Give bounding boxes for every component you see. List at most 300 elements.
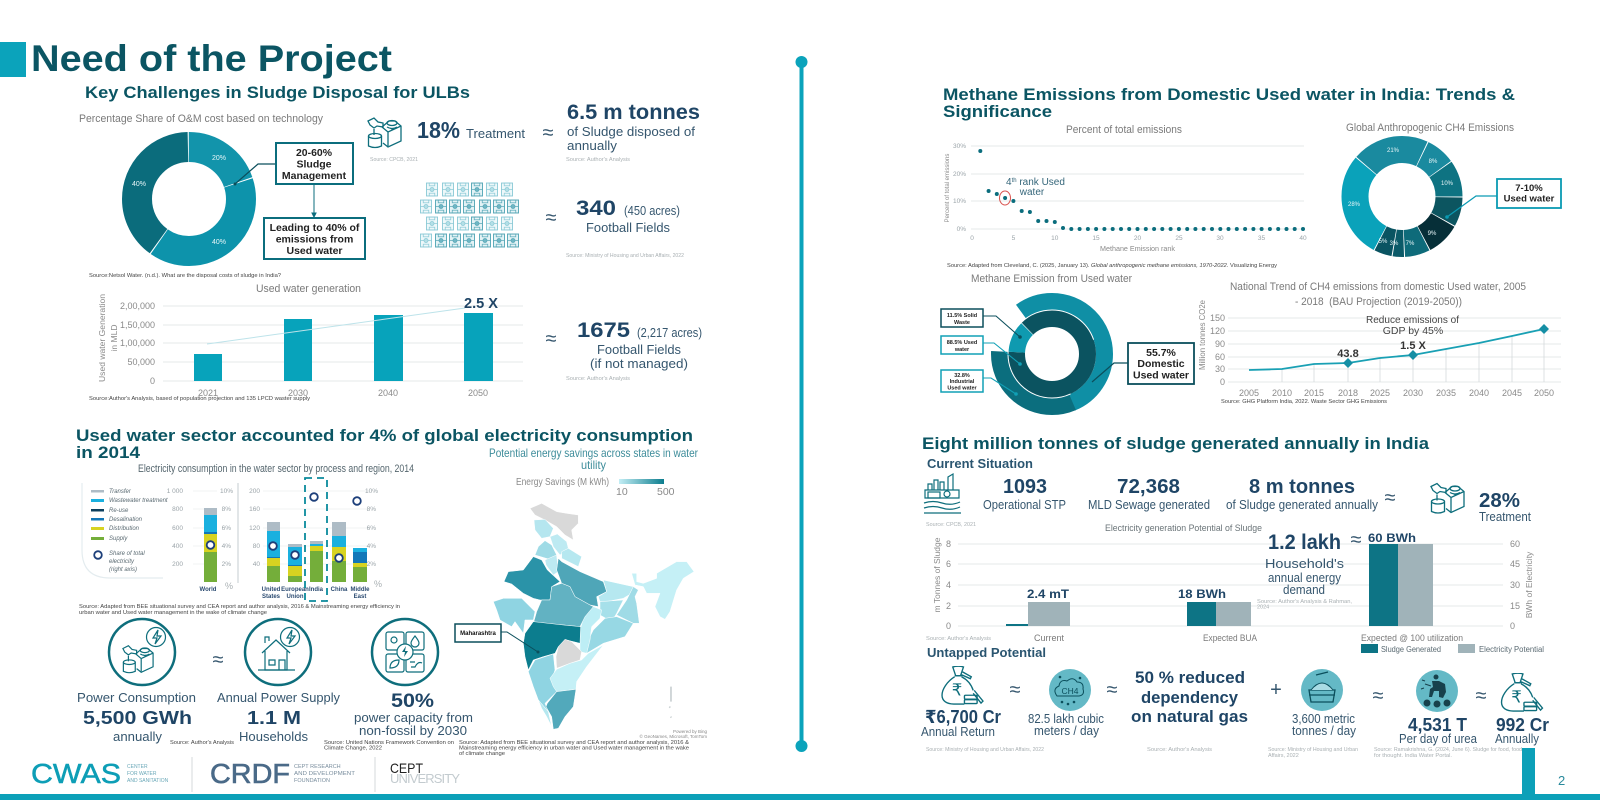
title accent square bbox=[0, 42, 26, 77]
scatter chart title: Percent of total emissions bbox=[1066, 124, 1182, 136]
stat: annual power supply: Households bbox=[239, 729, 309, 744]
page number: 2 bbox=[1558, 773, 1565, 788]
logo: CWAS: CENTER bbox=[127, 764, 148, 770]
source: UNFCCC: Climate Change, 2022 bbox=[324, 746, 382, 752]
source: author analysis: Source: Author's Analysis bbox=[926, 636, 991, 642]
line chart: national CH4 trend: Reduce emissions of bbox=[1366, 314, 1459, 326]
line chart: national CH4 trend: 60 bbox=[1215, 352, 1225, 362]
stacked bar chart: world: 400 bbox=[172, 543, 183, 550]
logo: CRDF: AND DEVELOPMENT bbox=[294, 771, 356, 777]
map attribution: © GeoNames, Microsoft, TomTom bbox=[640, 733, 707, 739]
donut chart: O&M cost share: 20% bbox=[212, 155, 226, 162]
logo: CWAS bbox=[31, 758, 169, 789]
bar chart: used water generation bbox=[97, 294, 523, 398]
donut labels: 9% bbox=[1428, 231, 1437, 237]
stacked bar chart: world: 1 000 bbox=[167, 488, 183, 495]
stat: reduced gas dependency bbox=[1131, 668, 1248, 726]
callout: 1.2 lakh households: 1.2 lakh bbox=[1268, 531, 1341, 554]
icon: household power circle bbox=[245, 619, 311, 685]
stat: reduced gas dependency: 50 % reduced bbox=[1135, 668, 1245, 687]
stacked bar chart: regions: Middle bbox=[350, 587, 370, 593]
bar chart: electricity potential of sludge: Expected @ 100 utilization bbox=[1361, 633, 1463, 643]
stacked bar chart: world: 2% bbox=[222, 561, 231, 568]
bar chart: used water generation: 2,00,000 bbox=[120, 301, 155, 311]
stat: sludge generated: 8 m tonnes bbox=[1249, 476, 1355, 498]
scatter chart: methane emission rank: 0% bbox=[957, 226, 966, 233]
legend: stacked chart: Transfer bbox=[109, 489, 132, 495]
stat: annual return bbox=[921, 707, 1001, 739]
donut labels: 5% bbox=[1379, 239, 1388, 245]
sources: untapped potential: Affairs, 2022 bbox=[1268, 753, 1299, 759]
bar chart: electricity potential of sludge: 4 bbox=[946, 580, 951, 590]
stacked bar chart: world: 6% bbox=[222, 525, 231, 532]
callout: sludge management: Sludge bbox=[296, 158, 332, 170]
stat: metric tonnes: 3,600 metric bbox=[1292, 711, 1355, 726]
approx sign: ≈ bbox=[1373, 685, 1384, 707]
line chart: national CH4 trend bbox=[1198, 299, 1561, 398]
stacked bar chart: regions: European bbox=[281, 587, 309, 593]
source: author analysis: Source: Author's Analysis bbox=[566, 376, 630, 382]
callout: 1.2 lakh households bbox=[1257, 529, 1362, 610]
legend: stacked chart: Distribution bbox=[109, 526, 140, 532]
bar chart: used water generation: 2030 bbox=[288, 388, 308, 398]
callout: 1.2 lakh households: Source: Author's Analysis & Rahman, bbox=[1257, 599, 1352, 605]
logo: CEPT University: UNIVERSITY bbox=[390, 771, 460, 786]
scatter chart: methane emission rank: 25 bbox=[1175, 235, 1183, 242]
bar chart: electricity potential of sludge: 8 bbox=[946, 539, 951, 549]
logo: CRDF bbox=[210, 758, 356, 789]
stacked bar chart: regions: East bbox=[354, 594, 366, 600]
scatter chart: methane emission rank: 10% bbox=[953, 198, 966, 205]
bar chart: used water generation: 2050 bbox=[468, 388, 488, 398]
bar chart: electricity potential of sludge: 45 bbox=[1510, 559, 1520, 569]
logo: CWAS: CWAS bbox=[31, 758, 121, 789]
bar chart: electricity potential of sludge: Current bbox=[1034, 633, 1065, 643]
nested donut chart: methane from used water bbox=[1000, 302, 1104, 406]
stat: annual value: 992 Cr bbox=[1496, 715, 1549, 735]
panel: eight million tonnes of sludge bbox=[921, 434, 1549, 759]
callout: domestic used water: 55.7% bbox=[1146, 347, 1177, 359]
stacked bar chart: world: World bbox=[200, 587, 217, 593]
callout: industrial used water bbox=[941, 370, 1018, 396]
stacked bar chart: regions: % bbox=[374, 579, 382, 589]
stat: 1675 football fields: (2,217 acres) bbox=[637, 325, 702, 340]
bar chart: electricity potential of sludge: BWh of Electricity bbox=[1524, 551, 1534, 618]
bar chart title: Electricity generation Potential of Sludge bbox=[1105, 523, 1262, 534]
scatter chart: methane emission rank: Percent of total emissions bbox=[945, 154, 951, 222]
callout: sludge management bbox=[234, 143, 353, 186]
callout: 1.2 lakh households: 2024 bbox=[1257, 604, 1269, 610]
callout: domestic used water: Used water bbox=[1133, 370, 1189, 382]
line chart: national CH4 trend: 2018 bbox=[1338, 388, 1358, 398]
stacked bar chart: regions: United bbox=[262, 587, 281, 593]
stat: reduced gas dependency: dependency bbox=[1141, 688, 1239, 707]
callout: domestic used water bbox=[1092, 343, 1194, 384]
legend: stacked chart: Desalination bbox=[109, 517, 143, 523]
stat: 1675 football fields: 1675 bbox=[577, 319, 630, 342]
line chart: national CH4 trend: 2040 bbox=[1469, 388, 1489, 398]
map title: Potential energy savings across states in water bbox=[489, 446, 698, 460]
bar chart: electricity potential of sludge: 6 bbox=[946, 559, 951, 569]
stacked chart title: Electricity consumption in the water sector by process and region, 2014 bbox=[138, 463, 414, 475]
stacked bar chart: world: 800 bbox=[172, 506, 183, 513]
callout: industrial used water: Used water bbox=[947, 386, 978, 392]
approx sign: ≈ bbox=[546, 207, 557, 229]
stacked bar chart: world: 4% bbox=[222, 543, 231, 550]
line chart: national CH4 trend: 43.8 bbox=[1337, 348, 1359, 360]
scatter chart: methane emission rank: rank Used bbox=[1017, 177, 1065, 188]
centre divider with end dots bbox=[796, 56, 808, 752]
stat: 50% non-fossil bbox=[354, 691, 473, 738]
heading: electricity consumption bbox=[76, 426, 693, 462]
stacked bar chart: regions: 8% bbox=[367, 506, 376, 513]
callout: 1.2 lakh households: Household's bbox=[1265, 556, 1345, 571]
line chart: national CH4 trend: 2045 bbox=[1502, 388, 1522, 398]
heading: methane emissions bbox=[943, 85, 1515, 121]
stacked bar chart: regions: 200 bbox=[249, 488, 260, 495]
map attribution bbox=[640, 729, 707, 739]
stat: urea per day bbox=[1399, 715, 1478, 746]
bar chart: used water generation: 1,00,000 bbox=[120, 338, 155, 348]
stat: annual power supply: 1.1 M bbox=[247, 708, 301, 728]
donut chart title: Global Anthropogenic CH4 Emissions bbox=[1346, 122, 1514, 134]
stat: reduced gas dependency: on natural gas bbox=[1131, 707, 1248, 726]
map legend: 500 bbox=[657, 486, 675, 498]
stacked bar chart: world: 200 bbox=[172, 561, 183, 568]
stat: power consumption: Power Consumption bbox=[77, 690, 196, 705]
line chart: national CH4 trend: 0 bbox=[1220, 377, 1225, 387]
map legend bbox=[516, 476, 675, 498]
stat: 18% treatment bbox=[417, 117, 525, 143]
line chart: national CH4 trend: 2015 bbox=[1304, 388, 1324, 398]
logo: CEPT University: CEPT bbox=[390, 760, 423, 776]
line chart: national CH4 trend: 2025 bbox=[1370, 388, 1390, 398]
stacked bar chart: regions: 6% bbox=[367, 525, 376, 532]
stat: 1675 football fields: (if not managed) bbox=[590, 356, 688, 371]
stat: power consumption: 5,500 GWh bbox=[83, 708, 192, 728]
source: scatter chart: Source: Adapted from Cleveland, C. (2025, January 13). Global anthropogenic methane emissions, 1970-2022. Visualizing Energy bbox=[947, 263, 1277, 269]
source: donut: Source:Netsol Water. (n.d.). What are the disposal costs of sludge in India? bbox=[89, 273, 281, 279]
stat: 340 football fields: 340 bbox=[576, 197, 616, 220]
callout: industrial used water: 32.8% bbox=[954, 373, 970, 379]
source: UNFCCC: Source: United Nations Framework Convention on bbox=[324, 740, 454, 746]
approx sign: ≈ bbox=[546, 328, 557, 350]
bar chart: used water generation: 2040 bbox=[378, 388, 398, 398]
bar chart: electricity potential of sludge: Expected BUA bbox=[1203, 633, 1257, 643]
source: bar chart: Source:Author's Analysis, based of population projection and 135 LPCD waster supply bbox=[89, 396, 310, 402]
stat: 50% non-fossil: 50% bbox=[391, 691, 434, 712]
logo: CRDF: CEPT RESEARCH bbox=[294, 764, 341, 770]
bar chart: used water generation: Used water Generation bbox=[97, 294, 107, 382]
stacked bar chart: regions: 80 bbox=[253, 543, 260, 550]
callout: used water share: water bbox=[954, 347, 970, 353]
callout: solid waste: Waste bbox=[954, 320, 970, 326]
line chart title: - 2018 (BAU Projection (2019-2050)) bbox=[1295, 296, 1462, 308]
logo: CWAS: AND SANITATION bbox=[127, 778, 169, 784]
approx sign: ≈ bbox=[1107, 679, 1118, 701]
stat: urea per day: Per day of urea bbox=[1399, 731, 1478, 746]
donut chart title: Percentage Share of O&M cost based on technology bbox=[79, 113, 323, 125]
logo: CRDF: FOUNDATION bbox=[294, 778, 330, 784]
panel: methane emissions bbox=[941, 85, 1561, 406]
bar chart: used water generation: 0 bbox=[150, 376, 155, 386]
stat: cubic metres: meters / day bbox=[1034, 723, 1099, 738]
scatter chart: methane emission rank: 10 bbox=[1051, 235, 1059, 242]
donut labels: 8% bbox=[1429, 159, 1438, 165]
stat: operational STP: 1093 bbox=[1003, 476, 1047, 498]
stat: annual return: Annual Return bbox=[921, 724, 995, 739]
scatter chart: methane emission rank: 5 bbox=[1012, 235, 1016, 242]
stacked bar chart: world: 10% bbox=[220, 488, 233, 495]
donut chart: global CH4 emissions bbox=[1355, 150, 1449, 244]
stacked bar chart: world: 600 bbox=[172, 525, 183, 532]
line chart: national CH4 trend: 2010 bbox=[1272, 388, 1292, 398]
scatter chart: methane emission rank: 20 bbox=[1134, 235, 1141, 242]
callout: domestic used water: Domestic bbox=[1137, 358, 1185, 370]
legend: sludge chart bbox=[1361, 644, 1544, 654]
sources: untapped potential: for thought. India Water Portal. bbox=[1374, 753, 1452, 759]
bar chart: used water generation: 2.5 X bbox=[464, 296, 498, 312]
bar chart: electricity potential of sludge: 0 bbox=[1510, 621, 1515, 631]
source: map: Source: Adapted from BEE situational survey and CEA report and author analysis, 2016 & bbox=[459, 740, 689, 746]
heading: key challenges: Key Challenges in Sludge Disposal for ULBs bbox=[85, 83, 470, 102]
donut chart: O&M cost share: 40% bbox=[132, 181, 146, 188]
callout: 7-10% used water: 7-10% bbox=[1515, 183, 1543, 194]
stat: annual value: Annually bbox=[1495, 731, 1539, 746]
scatter chart: methane emission rank: 30 bbox=[1216, 235, 1224, 242]
stat: 28% treatment: Treatment bbox=[1479, 509, 1531, 524]
bar chart: electricity potential of sludge bbox=[932, 531, 1534, 643]
choropleth map of India bbox=[493, 503, 694, 729]
callout: 1.2 lakh households: ≈ bbox=[1351, 529, 1362, 551]
approx sign: ≈ bbox=[543, 122, 554, 144]
map attribution: Powered by Bing bbox=[673, 729, 707, 734]
callout: emissions from used water: Used water bbox=[286, 245, 343, 257]
stacked bar chart: regions: 2% bbox=[367, 561, 376, 568]
page number tab bbox=[1522, 748, 1535, 794]
stat: 340 football fields: (450 acres) bbox=[624, 203, 680, 218]
legend: stacked chart: Re-use bbox=[109, 508, 129, 514]
stat: cubic metres: 82.5 lakh cubic bbox=[1028, 711, 1104, 726]
stacked bar chart: regions bbox=[249, 478, 382, 601]
stat: annual power supply bbox=[217, 690, 340, 744]
panel: key challenges in sludge disposal bbox=[79, 83, 702, 402]
stacked bar chart: regions: 160 bbox=[249, 506, 260, 513]
bar chart: electricity potential of sludge: 2 bbox=[946, 601, 951, 611]
source: CPCB: Source: CPCB, 2021 bbox=[370, 157, 418, 163]
stat: annual return: ₹6,700 Cr bbox=[925, 707, 1001, 727]
stat: urea per day: 4,531 T bbox=[1408, 715, 1467, 735]
stat: metric tonnes bbox=[1292, 711, 1356, 738]
legend: stacked chart: Wastewater treatment bbox=[109, 498, 168, 504]
line chart title bbox=[1230, 281, 1526, 308]
stacked bar chart: regions: China bbox=[331, 587, 348, 593]
stat: 50% non-fossil: power capacity from bbox=[354, 710, 473, 725]
callout: industrial used water: Industrial bbox=[950, 379, 975, 385]
scatter chart: methane emission rank: 35 bbox=[1258, 235, 1265, 242]
bar chart: used water generation: in MLD bbox=[109, 325, 119, 351]
stat: annual power supply: Annual Power Supply bbox=[217, 690, 340, 705]
source: map: of climate change bbox=[459, 751, 505, 757]
heading: eight million tonnes: Eight million tonnes of sludge generated annually in India bbox=[922, 434, 1430, 453]
subheading: current situation: Current Situation bbox=[927, 457, 1033, 471]
panel: electricity consumption bbox=[76, 426, 707, 757]
line chart: national CH4 trend: 2005 bbox=[1239, 388, 1259, 398]
donut chart: O&M cost share bbox=[132, 147, 241, 251]
bar chart title: Used water generation bbox=[256, 283, 361, 295]
callout: solid waste: 11.5% Solid bbox=[947, 313, 977, 319]
icon: power consumption circle bbox=[109, 619, 175, 685]
stat: 6.5 m tonnes: 6.5 m tonnes bbox=[567, 101, 700, 124]
scatter chart: methane emission rank: 15 bbox=[1092, 235, 1100, 242]
callout: emissions from used water: Leading to 40% of bbox=[270, 222, 360, 234]
callout: emissions from used water bbox=[264, 218, 365, 259]
legend: stacked chart bbox=[82, 483, 168, 578]
callout: solid waste bbox=[941, 309, 1022, 339]
icon: money bag bbox=[1502, 673, 1542, 711]
source: stacked chart: urban water and Used water management in the wake of climate change bbox=[79, 610, 267, 616]
stacked bar chart: regions: 40 bbox=[253, 561, 260, 568]
donut labels: 7% bbox=[1406, 241, 1415, 247]
scatter chart: methane emission rank: 40 bbox=[1299, 235, 1307, 242]
bar chart: electricity potential of sludge: m Tonnes of Sludge bbox=[932, 537, 942, 612]
donut labels bbox=[1348, 148, 1454, 247]
stat: 6.5 m tonnes: annually bbox=[567, 138, 618, 153]
line chart: national CH4 trend: 2035 bbox=[1436, 388, 1456, 398]
line chart: national CH4 trend: 90 bbox=[1215, 339, 1225, 349]
stacked bar chart: regions: States bbox=[262, 594, 281, 600]
source: stacked chart: Source: Adapted from BEE situational survey and CEA report and author analysis, 2016 & Mainstreaming energy efficiency in bbox=[79, 604, 400, 610]
sources: untapped potential: Source: Ramakrishna, G. (2024, June 6). Sludge for food, food bbox=[1374, 747, 1522, 753]
map legend: 10 bbox=[616, 486, 628, 498]
donut labels: 10% bbox=[1441, 181, 1454, 187]
callout: 7-10% used water: Used water bbox=[1504, 194, 1555, 204]
stat: sewage generated: MLD Sewage generated bbox=[1088, 497, 1210, 512]
line chart: national CH4 trend: 2030 bbox=[1403, 388, 1423, 398]
stat: sewage generated bbox=[1088, 476, 1210, 512]
bar chart: used water generation: 2021 bbox=[198, 388, 218, 398]
scatter chart: methane emission rank: 4 bbox=[1006, 177, 1012, 188]
source: ministry: Source: Ministry of Housing and Urban Affairs, 2022 bbox=[566, 253, 684, 259]
scatter chart: methane emission rank: water bbox=[1019, 187, 1045, 198]
scatter chart: methane emission rank: th bbox=[1012, 178, 1017, 184]
icon: renewable energy circle bbox=[372, 619, 438, 685]
stacked bar chart: regions: 120 bbox=[249, 525, 260, 532]
bar chart: electricity potential of sludge: 15 bbox=[1510, 601, 1520, 611]
icon: farmer with fertiliser bbox=[1416, 670, 1458, 712]
stacked bar chart: regions: 10% bbox=[365, 488, 378, 495]
line chart: national CH4 trend: 120 bbox=[1210, 326, 1225, 336]
sources: untapped potential bbox=[926, 747, 1522, 759]
icon: treatment plant bbox=[1431, 484, 1464, 513]
stat: power consumption: annually bbox=[113, 729, 162, 744]
stacked bar chart: regions: 4% bbox=[367, 543, 376, 550]
stat: sludge generated: of Sludge generated annually bbox=[1226, 497, 1378, 512]
icon: CH4 cloud bbox=[1049, 669, 1091, 711]
callout: used water share: 88.5% Used bbox=[947, 340, 977, 346]
logo: CWAS: FOR WATER bbox=[127, 771, 157, 777]
source: stacked chart bbox=[79, 604, 400, 616]
title: Need of the Project bbox=[31, 38, 392, 79]
stat: 340 football fields bbox=[576, 197, 680, 235]
line chart: national CH4 trend: 150 bbox=[1210, 313, 1225, 323]
legend: stacked chart: Share of total bbox=[109, 551, 145, 557]
footer logos bbox=[31, 757, 460, 792]
stat: annual value bbox=[1495, 715, 1549, 746]
scatter chart: methane emission rank: 20% bbox=[953, 171, 966, 178]
stat: metric tonnes: tonnes / day bbox=[1292, 723, 1356, 738]
stat: 18% treatment: Treatment bbox=[466, 126, 525, 141]
footer bar bbox=[0, 794, 1600, 800]
line chart: national CH4 trend: GDP by 45% bbox=[1383, 325, 1443, 337]
line chart: national CH4 trend: 30 bbox=[1215, 364, 1225, 374]
callout: used water share bbox=[941, 336, 1022, 366]
line chart: national CH4 trend: Million tonnes CO2e bbox=[1198, 299, 1207, 370]
bar chart: used water generation: 1,50,000 bbox=[120, 320, 155, 330]
callout: emissions from used water: emissions from bbox=[276, 234, 353, 246]
stat: operational STP: Operational STP bbox=[983, 497, 1066, 512]
source: map: Mainstreaming energy efficiency in urban water and Used water management in the wake bbox=[459, 746, 689, 752]
source: line chart: Source: GHG Platform India, 2022. Waste Sector GHG Emissions bbox=[1221, 399, 1387, 405]
approx sign: ≈ bbox=[1385, 487, 1396, 509]
legend: sludge chart: Electricity Potential bbox=[1479, 645, 1544, 654]
legend: stacked chart: Supply bbox=[109, 536, 128, 542]
scatter chart: methane emission rank: Methane Emission rank bbox=[1100, 246, 1176, 253]
stat: operational STP bbox=[983, 476, 1066, 512]
legend: stacked chart: (right axis) bbox=[109, 567, 137, 573]
callout: sludge management: Management bbox=[282, 170, 347, 182]
stat: 1675 football fields bbox=[577, 319, 702, 371]
nested donut title: Methane Emission from Used water bbox=[971, 273, 1132, 285]
map legend: Energy Savings (M kWh) bbox=[516, 476, 609, 488]
source: author analysis: Source: Author's Analysis bbox=[170, 740, 234, 746]
title block bbox=[0, 38, 392, 79]
approx sign: ≈ bbox=[1010, 679, 1021, 701]
icon: CH4 cloud: CH4 bbox=[1061, 686, 1079, 696]
stacked bar chart: world: % bbox=[225, 581, 233, 591]
icon: football fields grid bbox=[420, 183, 519, 247]
stat: 28% treatment bbox=[1479, 490, 1531, 524]
stat: 6.5 m tonnes bbox=[567, 101, 700, 153]
source: UNFCCC bbox=[324, 740, 454, 752]
icon: sewage treatment plant bbox=[924, 474, 961, 513]
stat: 18% treatment: 18% bbox=[417, 117, 460, 143]
sources: untapped potential: Source: Author's Analysis bbox=[1147, 747, 1212, 753]
bar chart: electricity potential of sludge: 18 BWh bbox=[1178, 587, 1226, 601]
stat: 1675 football fields: Football Fields bbox=[597, 342, 681, 357]
callout: 1.2 lakh households: annual energy bbox=[1268, 570, 1341, 585]
stacked bar chart: world bbox=[167, 483, 238, 593]
sources: untapped potential: Source: Ministry of Housing and Urban Affairs, 2022 bbox=[926, 747, 1044, 753]
icon: compost bin bbox=[1301, 669, 1343, 711]
stacked bar chart: regions: Union bbox=[286, 594, 304, 600]
bar chart: electricity potential of sludge: 30 bbox=[1510, 580, 1520, 590]
stat: 6.5 m tonnes: of Sludge disposed of bbox=[567, 124, 695, 139]
stat: 50% non-fossil: non-fossil by 2030 bbox=[359, 723, 467, 738]
heading: methane emissions: Methane Emissions from Domestic Used water in India: Trends & bbox=[943, 85, 1515, 104]
callout: sludge management: 20-60% bbox=[296, 147, 333, 159]
stat: 340 football fields: Football Fields bbox=[586, 220, 670, 235]
stat: cubic metres bbox=[1028, 711, 1104, 738]
callout: Maharashtra bbox=[455, 624, 540, 654]
stacked bar chart: regions: India bbox=[309, 587, 324, 593]
callout: Maharashtra: Maharashtra bbox=[460, 631, 496, 637]
bar chart: electricity potential of sludge: 2.4 mT bbox=[1027, 587, 1070, 601]
stat: 28% treatment: 28% bbox=[1479, 490, 1520, 512]
heading: electricity consumption: Used water sector accounted for 4% of global electricity consumption bbox=[76, 426, 693, 445]
subheading: untapped potential: Untapped Potential bbox=[927, 646, 1046, 660]
heading: methane emissions: Significance bbox=[943, 102, 1052, 121]
